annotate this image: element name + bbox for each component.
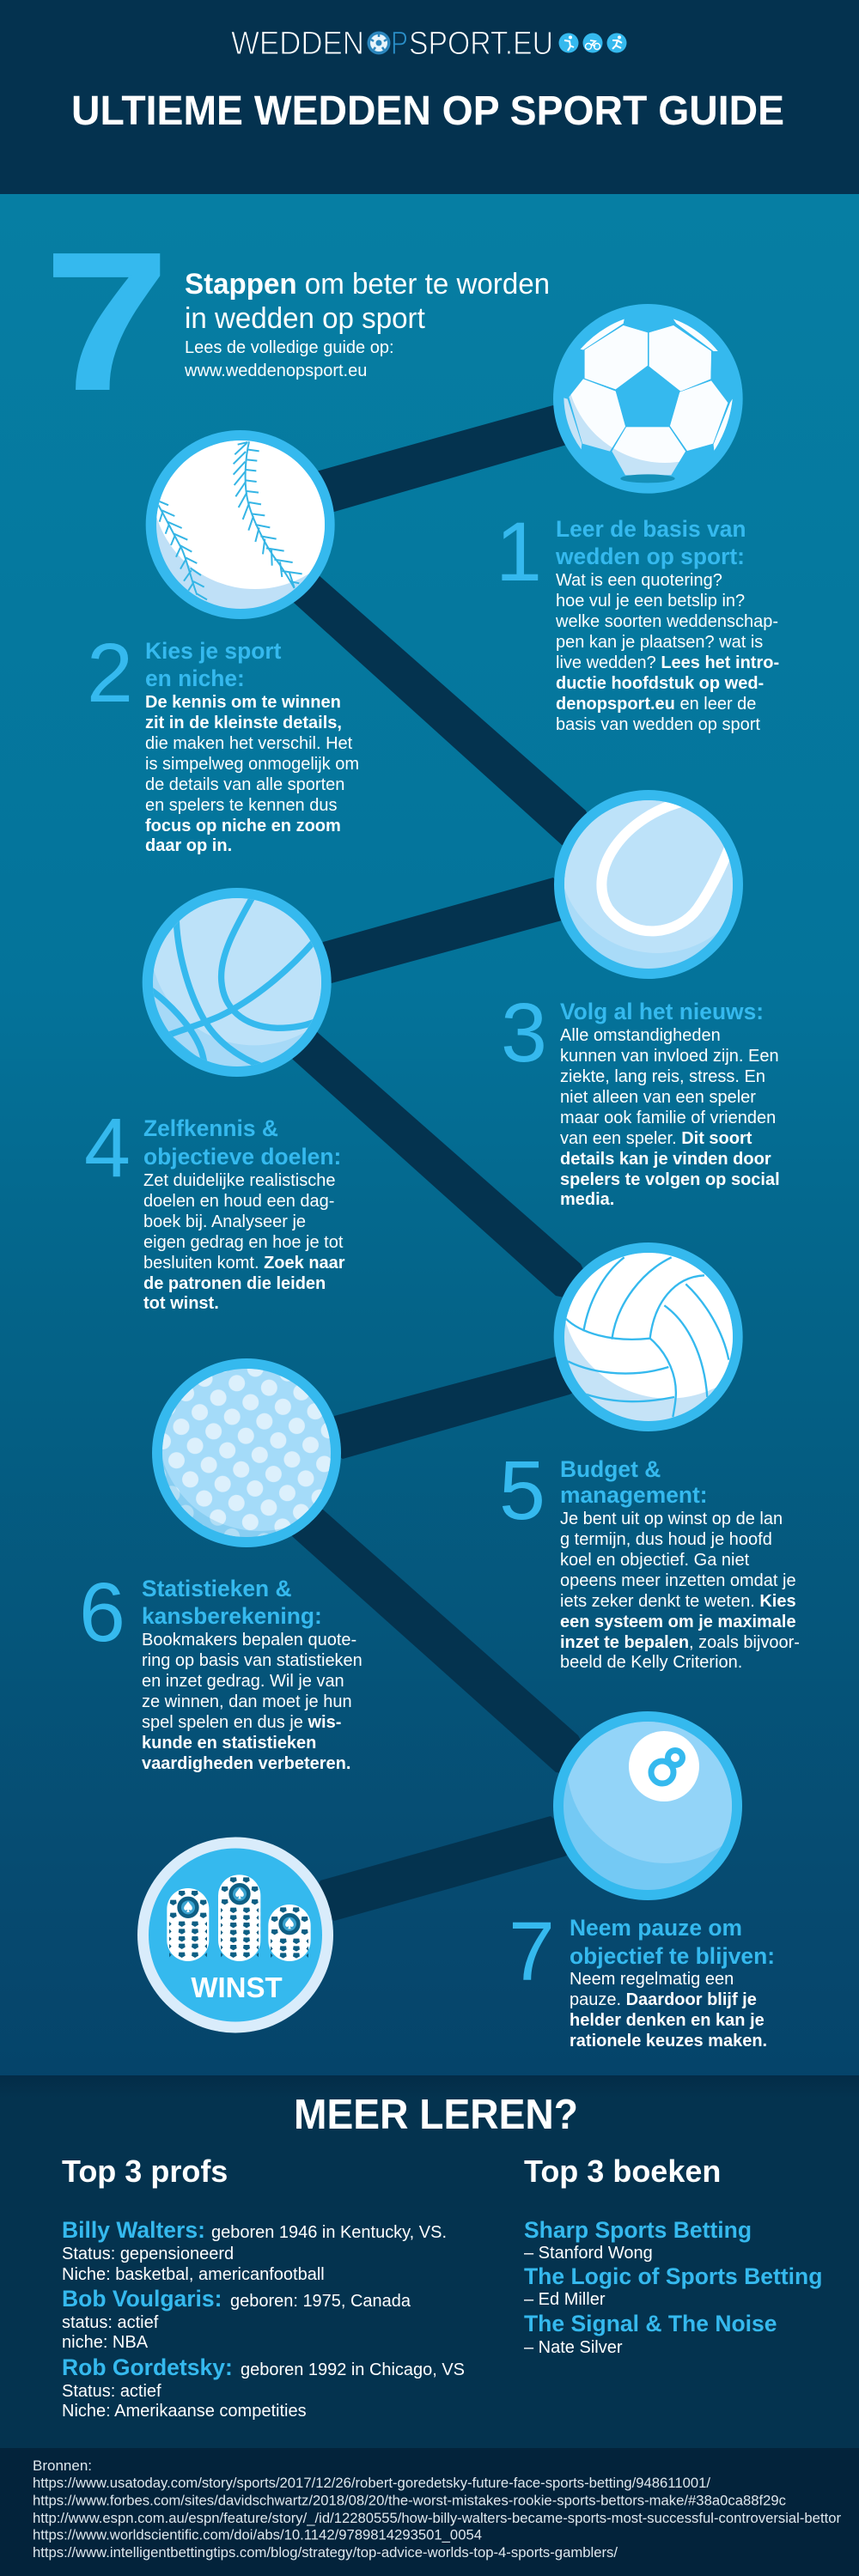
body 6: ze winnen, dan moet je hun — [142, 1692, 352, 1711]
header band — [0, 0, 859, 194]
heading 6: Statistieken & — [142, 1576, 292, 1601]
body 3: niet alleen van een speler — [560, 1088, 756, 1107]
ball 2: baseball — [146, 430, 335, 619]
poker chips — [167, 1874, 311, 1961]
body 2: De kennis om te winnen — [145, 693, 341, 712]
body 4: tot winst. — [143, 1294, 219, 1313]
number 2: 2 — [87, 626, 133, 720]
heading 5: management: — [560, 1482, 708, 1508]
body 1: hoe vul je een betslip in? — [556, 592, 745, 611]
icon: cyclist — [582, 33, 603, 53]
body 2: focus op niche en zoom — [145, 817, 341, 835]
icon: sprinter — [606, 33, 627, 53]
number 7: 7 — [509, 1905, 555, 1998]
body 4: boek bij. Analyseer je — [143, 1212, 306, 1231]
heading 6 — [142, 1576, 322, 1629]
number 4: 4 — [84, 1101, 131, 1194]
column: top 3 boeken: The Logic of Sports Betting — [524, 2263, 822, 2289]
body 7: rationele keuzes maken. — [570, 2032, 767, 2050]
body 1: Wat is een quotering? — [556, 571, 722, 590]
ball 4: basketball — [143, 888, 332, 1077]
body 2: en spelers te kennen dus — [145, 796, 337, 815]
column: top 3 profs: Niche: Amerikaanse competities — [62, 2402, 307, 2421]
column: top 3 profs — [62, 2154, 465, 2421]
column: top 3 profs: Rob Gordetsky: — [62, 2354, 233, 2380]
sources footer: https://www.forbes.com/sites/davidschwartz/2018/08/20/the-worst-mistakes-rookie-sports-bettors-make/#38a0ca88f29c — [33, 2492, 786, 2509]
heading meer leren: MEER LEREN? — [294, 2092, 578, 2138]
body 5: koel en objectief. Ga niet — [560, 1551, 750, 1570]
column: top 3 profs: status: actief — [62, 2313, 159, 2332]
step 5 text — [499, 1443, 800, 1672]
heading 7 — [570, 1915, 775, 1969]
number 1: 1 — [496, 505, 542, 598]
body 3: details kan je vinden door — [560, 1150, 771, 1169]
column: top 3 profs: niche: NBA — [62, 2333, 149, 2352]
column: top 3 boeken: – Nate Silver — [524, 2338, 623, 2357]
heading 2: en niche: — [145, 665, 245, 691]
column: top 3 profs: Bob Voulgaris: — [62, 2286, 222, 2312]
body 3: maar ook familie of vrienden — [560, 1109, 776, 1127]
heading 3: Volg al het nieuws: — [560, 999, 764, 1024]
body 3: spelers te volgen op social — [560, 1170, 780, 1189]
column: top 3 profs: geboren: 1975, Canada — [230, 2291, 411, 2311]
body 5: beeld de Kelly Criterion. — [560, 1653, 742, 1672]
sources footer: http://www.espn.com.au/espn/feature/story/_/id/12280555/how-billy-walters-became-sports-most-successful-controversial-bettor — [33, 2510, 841, 2526]
body 5: opeens meer inzetten omdat je — [560, 1571, 796, 1590]
body 2: is simpelweg onmogelijk om — [145, 755, 359, 774]
body 6: vaardigheden verbeteren. — [142, 1754, 350, 1773]
body 3: ziekte, lang reis, stress. En — [560, 1067, 765, 1086]
column: top 3 boeken: – Stanford Wong — [524, 2244, 653, 2263]
winst label: WINST — [191, 1971, 283, 2003]
ball 5: volleyball — [553, 1242, 743, 1431]
heading 2 — [145, 638, 282, 691]
heading 7: objectief te blijven: — [570, 1943, 775, 1969]
step 1 text — [496, 505, 779, 734]
sources footer: https://www.intelligentbettingtips.com/blog/strategy/top-advice-worlds-top-4-sports-gamblers/ — [33, 2544, 618, 2561]
logo — [231, 26, 627, 62]
heading 2: Kies je sport — [145, 638, 282, 664]
sources footer: https://www.worldscientific.com/doi/abs/10.1142/9789814293501_0054 — [33, 2526, 482, 2543]
body 5: een systeem om je maximale — [560, 1613, 796, 1631]
heading 5 — [560, 1456, 708, 1508]
icon: runner — [558, 33, 579, 53]
column: top 3 boeken: Sharp Sports Betting — [524, 2217, 752, 2243]
heading 7: Neem pauze om — [570, 1915, 742, 1941]
sources footer — [0, 2448, 859, 2576]
body 1: basis van wedden op sport — [556, 715, 760, 734]
body 6: ring op basis van statistieken — [142, 1651, 362, 1670]
heading 4: objectieve doelen: — [143, 1144, 341, 1170]
column: top 3 boeken: Top 3 boeken — [524, 2154, 721, 2189]
body 4: eigen gedrag en hoe je tot — [143, 1233, 344, 1252]
big number 7: 7 — [45, 212, 169, 430]
intro text: Lees de volledige guide op: — [185, 338, 394, 357]
body 6: kunde en statistieken — [142, 1734, 316, 1753]
body 1: denopsport.eu en leer de — [556, 695, 756, 714]
logo: WEDDEN — [231, 26, 364, 62]
column: top 3 profs: Top 3 profs — [62, 2154, 228, 2189]
intro text: Stappen om beter te worden — [185, 267, 550, 301]
heading 1: Leer de basis van — [556, 516, 746, 542]
body 1: welke soorten weddenschap- — [555, 612, 778, 631]
step 6 text — [79, 1565, 362, 1773]
number 6: 6 — [79, 1565, 125, 1659]
heading 5: Budget & — [560, 1456, 661, 1482]
body 5: Je bent uit op winst op de lan — [560, 1510, 783, 1528]
body 2: die maken het verschil. Het — [145, 734, 353, 753]
body 3: van een speler. Dit soort — [560, 1129, 752, 1148]
body 2: zit in de kleinste details, — [145, 714, 342, 732]
heading 6: kansberekening: — [142, 1603, 322, 1629]
logo: SPORT.EU — [409, 26, 553, 62]
column: top 3 profs: geboren 1992 in Chicago, VS — [241, 2360, 465, 2379]
heading 4: Zelfkennis & — [143, 1115, 278, 1141]
body 7: helder denken en kan je — [570, 2011, 765, 2030]
winst badge — [137, 1838, 333, 2033]
body 4: Zet duidelijke realistische — [143, 1171, 335, 1190]
body 3: kunnen van invloed zijn. Een — [560, 1047, 779, 1066]
number 5: 5 — [499, 1443, 545, 1537]
ball 1: soccer — [553, 304, 743, 494]
intro text: in wedden op sport — [185, 301, 425, 335]
body 3: Alle omstandigheden — [560, 1026, 721, 1045]
intro text: www.weddenopsport.eu — [184, 361, 367, 380]
body 7: pauze. Daardoor blijf je — [570, 1990, 757, 2009]
sources footer: Bronnen: — [33, 2458, 92, 2474]
column: top 3 profs: Status: gepensioneerd — [62, 2245, 234, 2263]
ball 6: golf — [152, 1358, 341, 1547]
body 5: inzet te bepalen, zoals bijvoor- — [560, 1633, 800, 1652]
number 8 on ball — [651, 1750, 682, 1783]
body 6: en inzet gedrag. Wil je van — [142, 1672, 344, 1691]
body 4: doelen en houd een dag- — [143, 1192, 334, 1211]
body 5: iets zeker denkt te weten. Kies — [560, 1592, 796, 1611]
ball 3: tennis — [554, 790, 743, 979]
bottom section: meer leren — [0, 2075, 859, 2448]
body 4: de patronen die leiden — [143, 1274, 326, 1293]
step 4 text — [84, 1101, 345, 1313]
column: top 3 boeken: The Signal & The Noise — [524, 2311, 777, 2336]
body 4: besluiten komt. Zoek naar — [143, 1254, 345, 1273]
column: top 3 profs: Billy Walters: — [62, 2217, 205, 2243]
column: top 3 profs: Status: actief — [62, 2382, 161, 2401]
heading 1 — [555, 516, 746, 569]
step 7 text — [509, 1905, 775, 2050]
step 3 text — [501, 986, 780, 1209]
sources footer: https://www.usatoday.com/story/sports/2017/12/26/robert-goredetsky-future-face-sports-betting/948611001/ — [33, 2475, 710, 2491]
title: ULTIEME WEDDEN OP SPORT GUIDE — [71, 88, 784, 134]
body 1: ductie hoofdstuk op wed- — [556, 674, 764, 693]
heading 4 — [143, 1115, 341, 1170]
column: top 3 boeken — [524, 2154, 822, 2357]
column: top 3 boeken: – Ed Miller — [524, 2290, 606, 2309]
body 1: pen kan je plaatsen? wat is — [556, 633, 763, 652]
connector path between balls — [275, 405, 601, 1921]
body 3: media. — [560, 1190, 614, 1209]
body 7: Neem regelmatig een — [570, 1970, 734, 1989]
body 2: de details van alle sporten — [145, 775, 344, 794]
logo: P — [391, 26, 408, 62]
page background — [0, 194, 859, 2075]
step 2 text — [87, 626, 359, 855]
body 6: spel spelen en dus je wis- — [142, 1713, 341, 1732]
intro block — [45, 212, 550, 430]
heading 1: wedden op sport: — [555, 544, 745, 569]
intro text — [184, 267, 550, 380]
body 1: live wedden? Lees het intro- — [556, 653, 779, 672]
number 3: 3 — [501, 986, 547, 1079]
ball 7: eight ball — [553, 1711, 742, 1900]
body 6: Bookmakers bepalen quote- — [142, 1631, 356, 1649]
column: top 3 profs: geboren 1946 in Kentucky, VS. — [211, 2222, 447, 2242]
column: top 3 profs: Niche: basketbal, americanfootball — [62, 2265, 325, 2284]
body 5: g termijn, dus houd je hoofd — [560, 1530, 772, 1549]
body 2: daar op in. — [145, 836, 232, 855]
